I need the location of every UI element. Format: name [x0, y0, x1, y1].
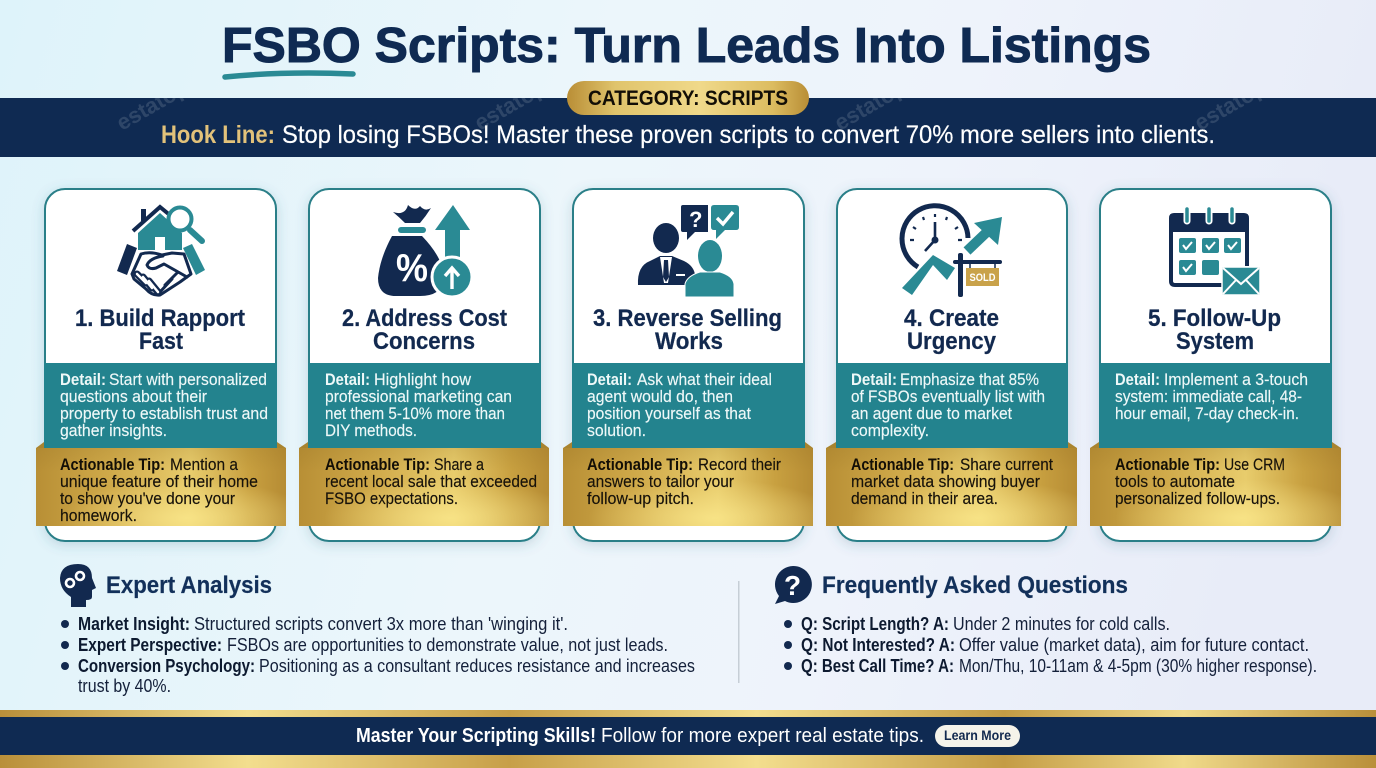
- actionable tip ribbon: personalized follow-ups.: [1115, 489, 1280, 508]
- detail text: [851, 370, 1045, 440]
- title: FSBO Scripts: Turn Leads Into Listings: [222, 19, 1151, 73]
- bullet list: [61, 614, 695, 696]
- detail text: complexity.: [851, 421, 929, 440]
- detail text: of FSBOs eventually list with: [851, 387, 1045, 406]
- actionable tip ribbon: answers to tailor your: [587, 472, 734, 491]
- actionable tip ribbon: demand in their area.: [851, 489, 998, 508]
- panel: card 4: [826, 189, 1077, 541]
- detail text: system: immediate call, 48-: [1115, 387, 1302, 406]
- detail text: agent would do, then: [587, 387, 733, 406]
- panel: card 1: [36, 189, 286, 541]
- heading: System: [1176, 328, 1254, 355]
- heading: [342, 305, 507, 355]
- detail text: professional marketing can: [325, 387, 512, 406]
- hook line band: Hook Line:: [161, 121, 275, 149]
- detail text: Ask what their ideal: [637, 370, 772, 389]
- faq list: Offer value (market data), aim for future contact.: [959, 635, 1309, 655]
- heading: Concerns: [373, 328, 475, 355]
- actionable tip ribbon: unique feature of their home: [60, 472, 258, 491]
- category pill: CATEGORY: SCRIPTS: [588, 87, 788, 110]
- actionable tip ribbon: market data showing buyer: [851, 472, 1040, 491]
- actionable tip ribbon: Actionable Tip:: [587, 455, 693, 474]
- actionable tip ribbon: FSBO expectations.: [325, 489, 458, 508]
- actionable tip ribbon: Share a: [434, 455, 484, 474]
- actionable tip ribbon: Share current: [960, 455, 1053, 474]
- icon: money bag with arrow: %: [396, 247, 428, 290]
- hook line band: [0, 98, 1376, 157]
- detail text: Implement a 3-touch: [1164, 370, 1308, 389]
- actionable tip ribbon: homework.: [60, 506, 137, 525]
- heading: Expert Analysis: [106, 572, 272, 599]
- actionable tip ribbon: [1090, 442, 1341, 526]
- icon: question bubble: ?: [784, 570, 801, 601]
- icon: clock, rising arrow and sold sign: [902, 206, 1002, 297]
- heading: 3. Reverse Selling: [593, 305, 782, 332]
- detail text: [1115, 370, 1308, 423]
- icon: question bubble: [775, 566, 812, 604]
- heading: [904, 305, 999, 355]
- detail text: Detail:: [1115, 370, 1160, 389]
- actionable tip ribbon: Actionable Tip:: [60, 455, 165, 474]
- heading: Works: [655, 328, 723, 355]
- category pill: [567, 81, 809, 115]
- actionable tip ribbon: Record their: [698, 455, 781, 474]
- panel: expert analysis: [60, 564, 695, 696]
- detail text: Emphasize that 85%: [900, 370, 1039, 389]
- hook line band: estatopass: [1190, 56, 1302, 135]
- heading: 1. Build Rapport: [75, 305, 245, 332]
- detail text: [60, 370, 268, 440]
- faq list: Under 2 minutes for cold calls.: [953, 614, 1170, 634]
- icon: agent and client with speech bubbles: [638, 205, 739, 297]
- actionable tip ribbon: [563, 442, 813, 526]
- faq list: Q: Best Call Time? A:: [801, 656, 954, 676]
- hook line band: estatopass: [470, 56, 582, 135]
- detail text: solution.: [587, 421, 646, 440]
- heading: [1148, 305, 1281, 355]
- detail text: questions about their: [60, 387, 207, 406]
- button: learn more: Learn More: [944, 727, 1011, 743]
- footer call to action: [0, 710, 1376, 768]
- detail text: hour email, 7-day check-in.: [1115, 404, 1299, 423]
- detail text: Highlight how: [374, 370, 472, 389]
- heading: [75, 305, 245, 355]
- icon: agent and client with speech bubbles: ?: [689, 207, 702, 232]
- footer call to action: Follow for more expert real estate tips.: [601, 725, 924, 747]
- bullet list: Positioning as a consultant reduces resistance and increases: [259, 656, 695, 676]
- panel: card 5: [1090, 189, 1341, 541]
- actionable tip ribbon: Actionable Tip:: [1115, 455, 1220, 474]
- bullet list: Conversion Psychology:: [78, 656, 255, 676]
- detail text: Detail:: [60, 370, 106, 389]
- detail text: net them 5-10% more than: [325, 404, 505, 423]
- actionable tip ribbon: to show you've done your: [60, 489, 235, 508]
- faq list: Mon/Thu, 10-11am & 4-5pm (30% higher response).: [959, 656, 1317, 676]
- heading: Frequently Asked Questions: [822, 572, 1128, 599]
- faq list: [784, 614, 1317, 676]
- actionable tip ribbon: Use CRM: [1224, 455, 1285, 474]
- panel: frequently asked questions: [775, 566, 1317, 676]
- faq list: Q: Script Length? A:: [801, 614, 949, 634]
- detail text: [587, 370, 772, 440]
- button: learn more: [935, 725, 1020, 747]
- detail text: Detail:: [587, 370, 632, 389]
- actionable tip ribbon: Mention a: [170, 455, 238, 474]
- heading: 4. Create: [904, 305, 999, 332]
- heading: 2. Address Cost: [342, 305, 507, 332]
- panel: card 3: [563, 189, 813, 541]
- detail text: Detail:: [851, 370, 897, 389]
- panel: card 2: [299, 189, 549, 541]
- detail text: property to establish trust and: [60, 404, 268, 423]
- faq list: Q: Not Interested? A:: [801, 635, 955, 655]
- bullet list: Expert Perspective:: [78, 635, 222, 655]
- detail text: gather insights.: [60, 421, 167, 440]
- bullet list: Structured scripts convert 3x more than 'winging it'.: [194, 614, 568, 634]
- hook line band: estatopass: [830, 56, 942, 135]
- hook line band: Stop losing FSBOs! Master these proven scripts to convert 70% more sellers into clients.: [282, 121, 1215, 149]
- actionable tip ribbon: [826, 442, 1077, 526]
- actionable tip ribbon: Actionable Tip:: [325, 455, 430, 474]
- footer call to action: Master Your Scripting Skills!: [356, 725, 596, 747]
- bullet list: FSBOs are opportunities to demonstrate value, not just leads.: [227, 635, 668, 655]
- bullet list: Market Insight:: [78, 614, 190, 634]
- hook line band: estatopass: [112, 56, 224, 135]
- actionable tip ribbon: [299, 442, 549, 526]
- icon: handshake and house: [117, 207, 205, 295]
- actionable tip ribbon: recent local sale that exceeded: [325, 472, 537, 491]
- detail text: DIY methods.: [325, 421, 417, 440]
- detail text: position yourself as that: [587, 404, 751, 423]
- icon: money bag with arrow: [378, 205, 472, 297]
- actionable tip ribbon: Actionable Tip:: [851, 455, 954, 474]
- icon: head with gears: [60, 564, 96, 607]
- heading: Fast: [139, 328, 183, 355]
- heading: 5. Follow-Up: [1148, 305, 1281, 332]
- detail text: Detail:: [325, 370, 370, 389]
- actionable tip ribbon: tools to automate: [1115, 472, 1235, 491]
- bullet list: trust by 40%.: [78, 676, 171, 696]
- heading: [593, 305, 782, 355]
- detail text: an agent due to market: [851, 404, 1012, 423]
- actionable tip ribbon: [36, 442, 286, 526]
- actionable tip ribbon: follow-up pitch.: [587, 489, 694, 508]
- heading: Urgency: [907, 328, 997, 355]
- icon: clock, rising arrow and sold sign: SOLD: [970, 272, 996, 284]
- icon: calendar with envelope: [1169, 209, 1260, 295]
- detail text: [325, 370, 512, 440]
- detail text: Start with personalized: [109, 370, 267, 389]
